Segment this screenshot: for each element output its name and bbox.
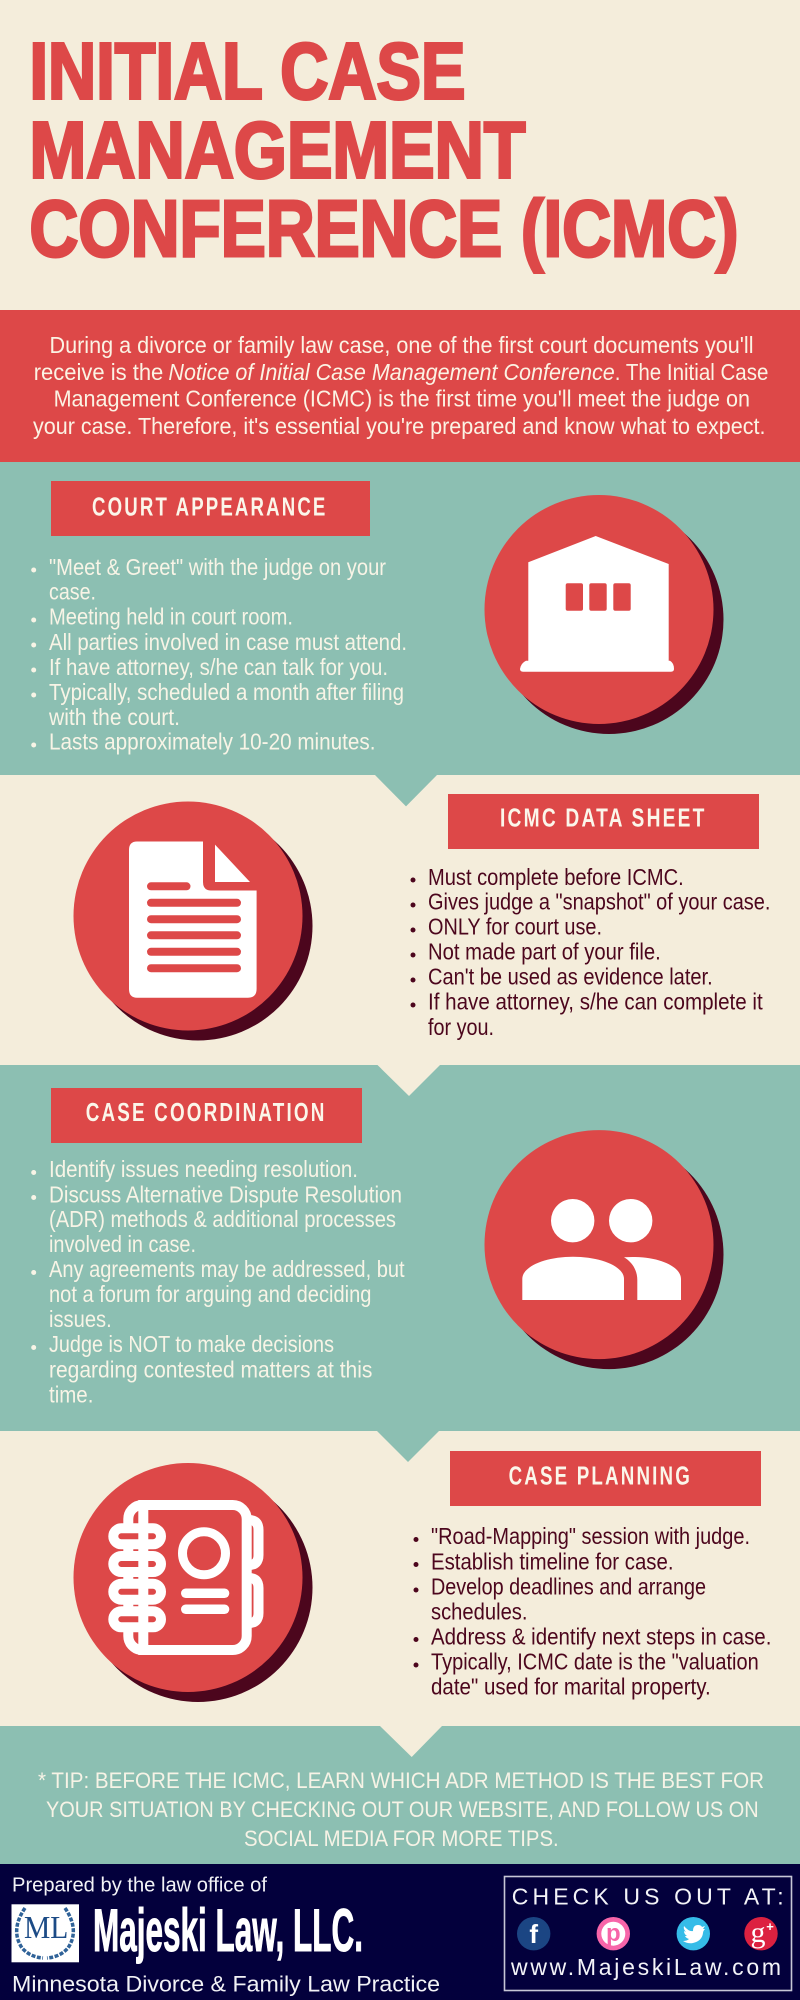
title: MANAGEMENT <box>30 106 526 194</box>
intro text <box>33 332 768 439</box>
bullet list: case coordination: Any agreements may be addressed, but <box>49 1256 405 1282</box>
heading: court appearance: COURT APPEARANCE <box>92 492 328 522</box>
bullet list: case coordination: Discuss Alternative Dispute Resolution <box>49 1181 402 1207</box>
bullet list: data sheet <box>410 864 770 1040</box>
bullet list: court appearance: "Meet & Greet" with the judge on your <box>49 554 386 580</box>
arrow: teal pointer <box>377 1431 439 1462</box>
bullet list: court appearance: with the court. <box>48 704 180 730</box>
bullet list: case coordination: Judge is NOT to make decisions <box>49 1331 334 1357</box>
bullet list: court appearance: If have attorney, s/he can talk for you. <box>49 654 388 680</box>
heading: court appearance <box>51 481 370 536</box>
panel: tip <box>0 1726 800 1864</box>
icon: pinterest <box>597 1917 630 1950</box>
practice line: Minnesota Divorce & Family Law Practice <box>12 1972 440 1997</box>
icon: google plus <box>744 1916 778 1950</box>
bullet list: case planning <box>414 1523 771 1700</box>
panel: icmc data sheet <box>0 775 800 1065</box>
bullet list: court appearance: case. <box>49 579 96 605</box>
bullet list: data sheet: Can't be used as evidence later. <box>428 963 713 989</box>
bullet list: case planning: schedules. <box>431 1598 528 1624</box>
bullet list: data sheet: ONLY for court use. <box>428 914 602 940</box>
arrow: teal pointer <box>375 775 437 806</box>
icon: notebook <box>74 1463 312 1702</box>
icon: pinterest: p <box>606 1920 621 1947</box>
check us out heading: CHECK US OUT AT: <box>512 1883 784 1909</box>
arrow: cream pointer <box>378 1065 440 1096</box>
intro text: Notice of Initial Case Management Conference <box>168 359 615 385</box>
heading: case coordination: CASE COORDINATION <box>86 1097 326 1127</box>
bullet list: case coordination: time. <box>49 1381 93 1407</box>
icon: courthouse <box>484 495 724 734</box>
heading: case planning <box>450 1451 761 1506</box>
bullet list: case planning: "Road-Mapping" session with judge. <box>431 1523 750 1549</box>
bullet list: case planning: date" used for marital property. <box>431 1674 711 1700</box>
bullet list: case coordination: regarding contested matters at this <box>49 1356 372 1382</box>
bullet list: case coordination: (ADR) methods & additional processes <box>49 1206 396 1232</box>
intro text: receive is the <box>34 359 163 385</box>
icon: document <box>74 802 312 1040</box>
icon: facebook <box>517 1917 550 1950</box>
arrow: cream pointer <box>380 1726 442 1757</box>
panel: footer <box>0 1864 800 2000</box>
prepared by text: Prepared by the law office of <box>12 1875 267 1897</box>
bullet list: data sheet: Not made part of your file. <box>428 938 661 964</box>
header panel <box>0 0 800 310</box>
icon: google plus: + <box>766 1919 774 1934</box>
tip text: * TIP: BEFORE THE ICMC, LEARN WHICH ADR METHOD IS THE BEST FOR <box>38 1768 764 1793</box>
panel: check us out <box>504 1876 792 1990</box>
bullet list: court appearance <box>31 554 407 755</box>
bullet list: data sheet: for you. <box>428 1014 494 1040</box>
panel: case planning <box>0 1431 800 1726</box>
bullet list: court appearance: Typically, scheduled a month after filing <box>49 679 404 705</box>
heading: icmc data sheet: ICMC DATA SHEET <box>500 803 707 833</box>
bullet list: court appearance: Lasts approximately 10-20 minutes. <box>49 729 376 755</box>
heading: icmc data sheet <box>448 794 759 849</box>
website url: www.MajeskiLaw.com <box>510 1954 781 1980</box>
tip text <box>38 1768 764 1851</box>
logo: ML laurel: ML <box>24 1909 68 1945</box>
bullet list: court appearance: All parties involved in case must attend. <box>49 629 407 655</box>
panel: case coordination <box>0 1065 800 1431</box>
bullet list: court appearance: Meeting held in court room. <box>49 604 293 630</box>
bullet list: case coordination: issues. <box>49 1306 112 1332</box>
title: INITIAL CASE <box>30 26 466 116</box>
icon: google plus: g <box>750 1916 766 1949</box>
intro text: During a divorce or family law case, one of the first court documents you'll <box>50 332 754 358</box>
bullet list: data sheet: Must complete before ICMC. <box>428 864 684 890</box>
bullet list: case planning: Typically, ICMC date is the "valuation <box>431 1649 759 1675</box>
icon: twitter <box>677 1917 710 1950</box>
panel: introduction <box>0 310 800 462</box>
logo: ML laurel <box>12 1904 79 1962</box>
bullet list: case planning: Establish timeline for case. <box>431 1548 674 1574</box>
bullet list: case planning: Develop deadlines and arrange <box>431 1574 706 1600</box>
law firm name: Majeski Law, LLC. <box>93 1897 363 1964</box>
icon: people <box>484 1130 724 1369</box>
intro text: . The Initial Case <box>615 359 768 385</box>
title <box>30 26 738 273</box>
bullet list: case coordination: Identify issues needing resolution. <box>49 1156 358 1182</box>
bullet list: case coordination: not a forum for arguing and deciding <box>49 1281 371 1307</box>
bullet list: case coordination <box>31 1156 405 1407</box>
heading: case coordination <box>51 1088 362 1143</box>
panel: court appearance <box>0 462 800 775</box>
intro text: your case. Therefore, it's essential you're prepared and know what to expect. <box>33 413 766 439</box>
heading: case planning: CASE PLANNING <box>509 1460 692 1490</box>
bullet list: case coordination: involved in case. <box>49 1231 196 1257</box>
bullet list: data sheet: If have attorney, s/he can complete it <box>428 989 763 1015</box>
icon: facebook: f <box>529 1919 538 1949</box>
intro text: Management Conference (ICMC) is the first time you'll meet the judge on <box>54 386 750 412</box>
tip text: SOCIAL MEDIA FOR MORE TIPS. <box>244 1826 559 1851</box>
